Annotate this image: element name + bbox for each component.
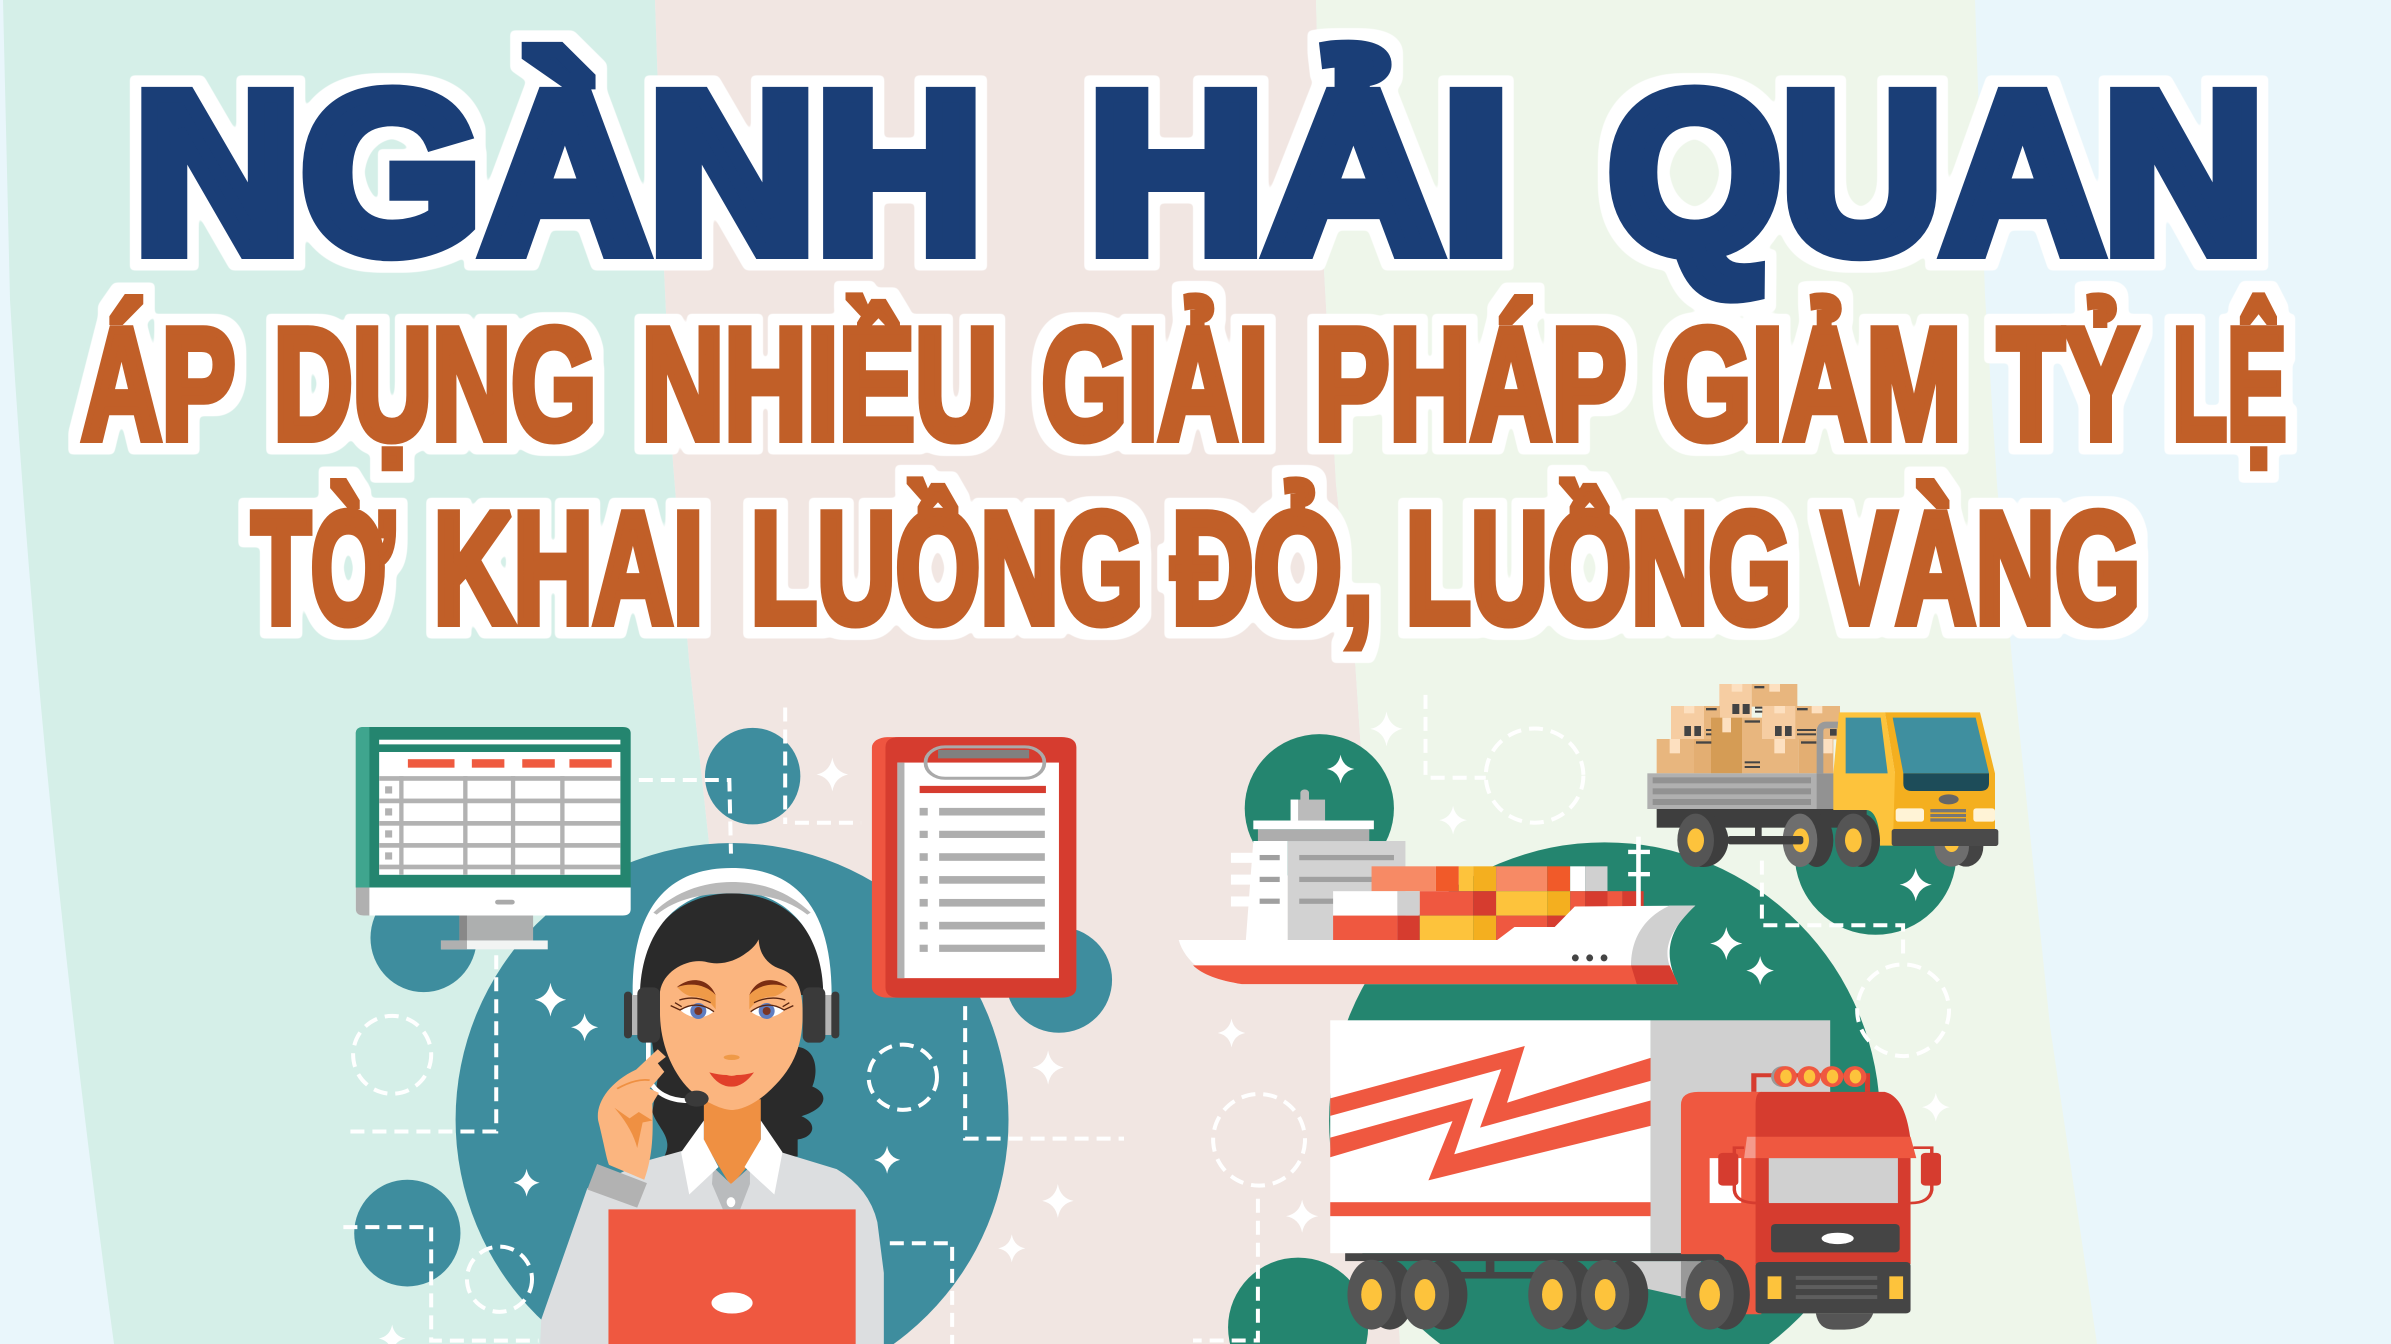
- subtitle line 1: PHÁP: [1314, 296, 1626, 472]
- subtitle line 2: VÀNG: [1822, 480, 2140, 656]
- icon: computer monitor with table: [356, 727, 631, 949]
- title line: customs sector: NGÀNH: [134, 47, 983, 300]
- collar: [681, 1120, 782, 1209]
- subtitle line 2: KHAI: [434, 480, 704, 656]
- subtitle line 1: GIẢM: [1662, 296, 1962, 472]
- truck bed: [1647, 725, 1838, 809]
- subtitle line 1: GIẢI: [1042, 296, 1268, 472]
- dashed connectors: [343, 708, 1124, 1344]
- title line: customs sector: HẢI: [1088, 47, 1510, 300]
- cab: [1833, 712, 1998, 867]
- neck: [704, 1099, 761, 1186]
- subtitle line 2: TỜ: [252, 480, 394, 656]
- headband: [633, 868, 832, 995]
- cab roof lights: [1754, 1066, 1868, 1092]
- containers: [1333, 866, 1644, 940]
- subtitle line 1: [82, 296, 2286, 472]
- subtitle line 1: ÁP: [82, 296, 236, 472]
- subtitle line 2: [252, 480, 2140, 656]
- hand: [598, 1049, 666, 1180]
- subtitle line 1: LỆ: [2172, 296, 2286, 472]
- title line: customs sector: [134, 47, 2264, 300]
- cardboard boxes: [1657, 684, 1840, 773]
- scene: logistics vehicles: [1179, 695, 1956, 1344]
- icon: container ship: [1179, 790, 1695, 984]
- scene: customs officer with monitor and clipboard: [343, 708, 1124, 1344]
- face: [660, 939, 803, 1110]
- icon: clipboard checklist: [872, 737, 1076, 998]
- icon: yellow cargo truck with boxes: [1647, 684, 1998, 867]
- title line: customs sector: QUAN: [1608, 47, 2264, 300]
- subtitle line 1: TỶ: [1998, 296, 2138, 472]
- subtitle line 2: LUỒNG: [1406, 480, 1792, 656]
- icon: red container truck: [1330, 1020, 1941, 1330]
- ear cups: [624, 987, 839, 1043]
- lips: [709, 1072, 754, 1087]
- subtitle line 1: DỤNG: [274, 296, 596, 472]
- subtitle line 1: NHIỀU: [642, 296, 998, 472]
- hair: [640, 893, 824, 995]
- eyes and brows: [671, 980, 793, 1019]
- green circle backdrops: [1228, 734, 1956, 1344]
- title: [82, 47, 2286, 656]
- circle backdrops: [354, 728, 1112, 1344]
- sparkles: [379, 758, 1074, 1344]
- subtitle line 2: LUỒNG: [750, 480, 1144, 656]
- laptop: [608, 1209, 856, 1344]
- hair back curls: [647, 1010, 823, 1156]
- nose: [724, 1055, 740, 1060]
- woman's head with headset: [624, 868, 839, 1110]
- sparkles: [1218, 711, 1950, 1233]
- shirt: [540, 1151, 884, 1344]
- dashed connectors: [1193, 695, 1949, 1340]
- truck wheels: [1347, 1260, 1750, 1330]
- microphone boom: [648, 1043, 709, 1107]
- wheels and chassis: [1657, 809, 1983, 867]
- subtitle line 2: ĐỎ,: [1172, 480, 1374, 656]
- sleeve cuff: [587, 1164, 647, 1208]
